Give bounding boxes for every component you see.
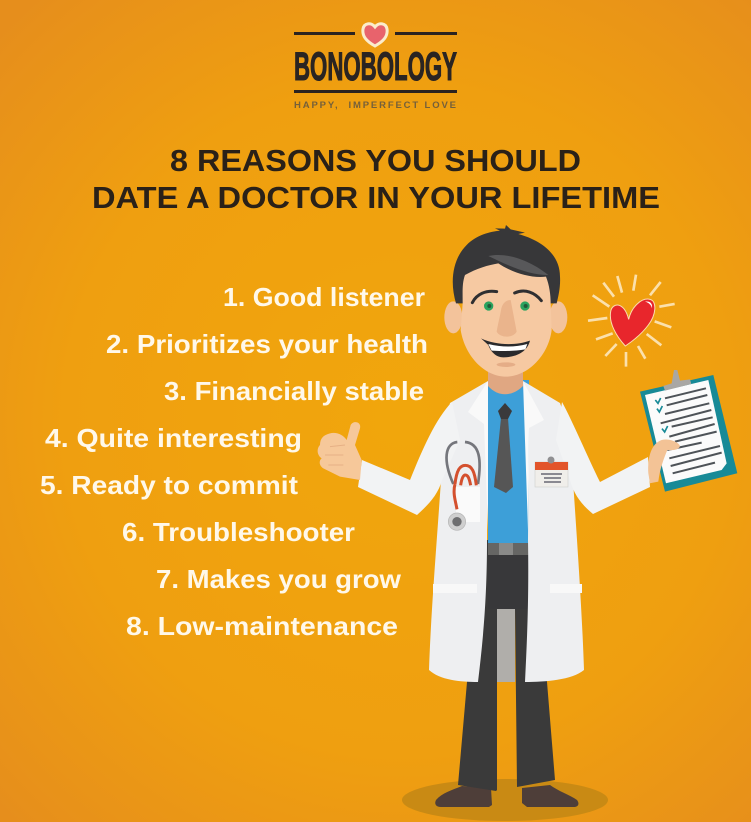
breast pocket	[456, 487, 480, 522]
left pupil	[487, 304, 491, 308]
reason 6: 6. Troubleshooter	[122, 517, 355, 547]
mouth	[481, 338, 530, 357]
right eyebrow	[515, 291, 541, 301]
stethoscope chest piece	[448, 513, 466, 530]
left pocket flap	[433, 584, 477, 593]
reason 5: 5. Ready to commit	[40, 470, 298, 500]
badge header	[535, 462, 568, 470]
reason 1: 1. Good listener	[223, 282, 425, 312]
logo	[294, 24, 457, 111]
logo rule right	[395, 32, 457, 35]
love heart with rays	[588, 275, 675, 367]
paper	[645, 380, 727, 483]
shirt	[488, 380, 529, 545]
hair	[453, 225, 560, 303]
nose	[497, 300, 517, 337]
right lapel	[523, 381, 544, 530]
logo heart	[363, 24, 387, 46]
chin shadow	[497, 362, 515, 367]
lab coat left panel	[429, 381, 488, 682]
list of reasons	[40, 282, 428, 641]
belt	[488, 543, 529, 555]
logo rule left	[294, 32, 355, 35]
head	[444, 225, 567, 377]
teeth	[488, 344, 527, 351]
right eye	[520, 301, 530, 311]
right pocket flap	[550, 584, 582, 593]
heart shine	[645, 301, 652, 308]
hair highlight	[488, 255, 548, 275]
floor shadow	[402, 779, 608, 821]
clipboard	[640, 370, 737, 492]
fingers and palm	[318, 422, 362, 480]
list lines	[661, 388, 722, 473]
stethoscope	[447, 442, 480, 530]
logo wordmark: BONOBOLOGY	[294, 45, 457, 89]
belt buckle	[499, 543, 513, 555]
finger shading	[325, 445, 345, 465]
left eye	[484, 301, 493, 311]
right leg	[488, 540, 555, 787]
title line 1: 8 REASONS YOU SHOULD	[170, 143, 581, 178]
left sleeve	[358, 402, 460, 515]
left eyebrow	[472, 291, 497, 303]
stethoscope chest centre	[452, 517, 462, 526]
stethoscope red tube	[454, 465, 476, 509]
necktie	[494, 418, 513, 493]
right ear	[549, 301, 567, 333]
reason 8: 8. Low-maintenance	[126, 611, 398, 641]
gap between legs	[497, 609, 515, 682]
badge card	[535, 462, 568, 487]
right shoe	[522, 785, 578, 807]
right sleeve	[556, 402, 650, 514]
left leg	[458, 540, 497, 791]
stethoscope grey tubes	[447, 442, 480, 484]
waist trousers	[488, 555, 528, 609]
left ear	[444, 301, 462, 333]
reason 7: 7. Makes you grow	[156, 564, 402, 594]
title	[92, 143, 660, 215]
logo tagline: HAPPY, IMPERFECT LOVE	[294, 100, 456, 111]
trousers	[458, 540, 555, 791]
badge clip	[548, 456, 554, 464]
lab coat right panel	[523, 381, 584, 682]
necktie knot	[498, 403, 512, 419]
right hand	[648, 440, 680, 483]
reason 4: 4. Quite interesting	[45, 423, 302, 453]
reason 2: 2. Prioritizes your health	[106, 329, 428, 359]
reason 3: 3. Financially stable	[164, 376, 424, 406]
check marks	[655, 398, 668, 432]
title line 2: DATE A DOCTOR IN YOUR LIFETIME	[92, 180, 660, 215]
board	[640, 375, 737, 492]
thumbs up hand	[318, 422, 362, 480]
left shoe	[435, 786, 492, 807]
badge text lines	[541, 474, 562, 482]
neck	[488, 365, 523, 394]
id badge	[535, 456, 568, 487]
left lapel	[468, 381, 488, 530]
doctor figure	[318, 225, 737, 807]
face	[461, 263, 552, 377]
heart	[610, 299, 655, 346]
clip	[663, 370, 691, 391]
right pupil	[524, 304, 528, 308]
logo rule lower	[294, 90, 457, 93]
rays	[588, 275, 675, 367]
